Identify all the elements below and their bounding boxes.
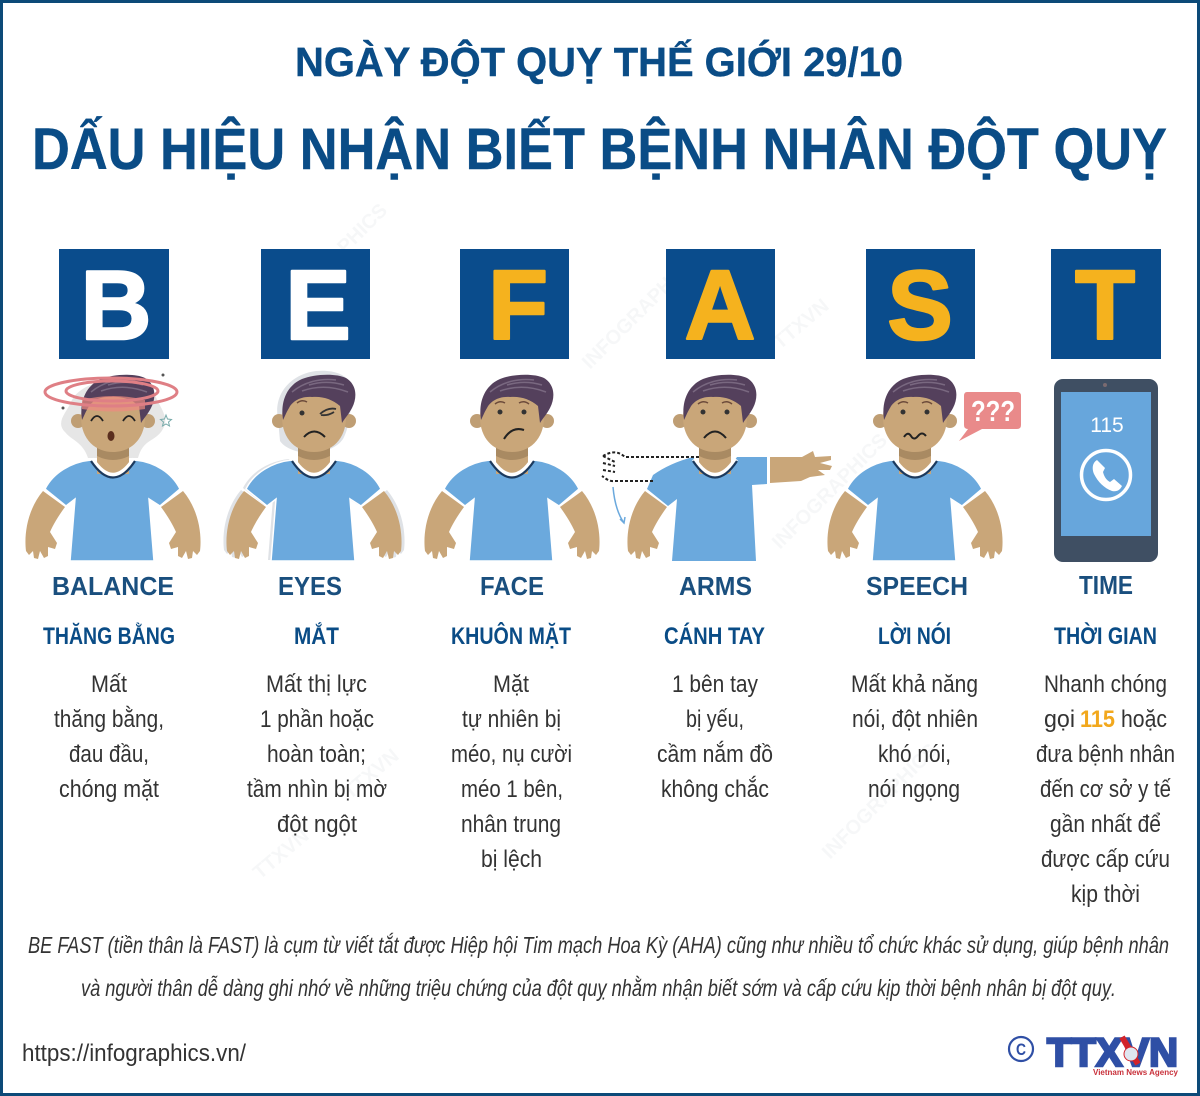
text block: time: được cấp cứu: [1041, 846, 1170, 873]
figure: eyes, vision loss person: [223, 371, 405, 561]
text block: face: bị lệch: [481, 846, 542, 873]
watermarks: INFOGRAPHICS: [818, 740, 942, 864]
text block: arms: [657, 671, 773, 803]
text block: face: [451, 671, 572, 873]
watermarks: TTXVN: [249, 825, 313, 884]
text block: time: kịp thời: [1071, 881, 1140, 908]
watermarks: TTXVN: [769, 295, 833, 354]
text block: eyes: 1 phần hoặc: [260, 706, 374, 733]
text block: balance: chóng mặt: [59, 776, 159, 803]
text block: face: méo, nụ cười: [451, 741, 572, 768]
figure: arms, one arm weak person: [602, 375, 832, 561]
English label row: BALANCE: [52, 571, 174, 601]
text block: time: [1036, 671, 1175, 908]
watermarks: INFOGRAPHICS: [268, 200, 392, 324]
text block: arms: bị yếu,: [686, 706, 744, 733]
Vietnamese heading row: KHUÔN MẶT: [451, 622, 571, 650]
text block: time: hoặc: [1121, 706, 1167, 733]
letter tile F: F: [488, 250, 548, 360]
Vietnamese heading row: THĂNG BẰNG: [43, 622, 175, 650]
Vietnamese heading row: MẮT: [294, 622, 339, 650]
letter tile S: [866, 249, 975, 360]
text block: eyes: tầm nhìn bị mờ: [247, 776, 387, 803]
figure: face, drooping mouth person: [424, 375, 600, 561]
figure: speech, slurred speech person: [827, 375, 1003, 561]
Vietnamese heading row: THỜI GIAN: [1054, 622, 1157, 650]
Vietnamese heading row: LỜI NÓI: [878, 622, 951, 650]
text block: time: đưa bệnh nhân: [1036, 741, 1175, 768]
text block: time: đến cơ sở y tế: [1040, 776, 1172, 803]
logo: TTXVN: C: [1016, 1040, 1026, 1059]
text block: speech: khó nói,: [878, 741, 951, 768]
text block: speech: Mất khả năng: [851, 671, 978, 698]
text block: speech: nói, đột nhiên: [852, 706, 978, 733]
title: event line: NGÀY ĐỘT QUỴ THẾ GIỚI 29/10: [295, 39, 903, 85]
text block: eyes: [247, 671, 387, 838]
speech bubble: [959, 392, 1021, 441]
text block: speech: [851, 671, 978, 803]
text block: balance: thăng bằng,: [54, 706, 164, 733]
text block: eyes: hoàn toàn;: [267, 741, 366, 768]
figure: balance, dizzy person: [25, 374, 201, 561]
English label row: EYES: [278, 571, 342, 601]
text block: balance: [54, 671, 164, 803]
watermarks: INFOGRAPHICS: [768, 430, 892, 554]
English label row: FACE: [480, 571, 544, 601]
text block: face: méo 1 bên,: [461, 776, 563, 803]
letter tile S: S: [887, 250, 953, 360]
text block: time: gần nhất để: [1050, 811, 1161, 838]
letter tile B: B: [81, 250, 151, 360]
watermarks: [249, 200, 942, 884]
English label row: ARMS: [679, 571, 752, 601]
footnote paragraph: [28, 932, 1169, 1001]
English label row: [52, 570, 1133, 601]
letter tile A: [666, 249, 775, 360]
text block: face: Mặt: [493, 671, 529, 698]
letter tile E: [261, 249, 370, 360]
text block: arms: 1 bên tay: [672, 671, 758, 698]
text block: eyes: Mất thị lực: [266, 671, 367, 698]
text block: time: Nhanh chóng: [1044, 671, 1167, 698]
text block: balance: đau đầu,: [69, 741, 149, 768]
icon: phone showing 115: 115: [1090, 414, 1124, 437]
text block: balance: Mất: [91, 671, 127, 698]
text block: arms: cầm nắm đồ: [657, 741, 773, 768]
icon: phone showing 115: [1054, 379, 1158, 562]
letter tile E: E: [285, 250, 351, 360]
source url: https://infographics.vn/: [22, 1040, 246, 1067]
letter tile F: [460, 249, 569, 360]
text block: speech: nói ngọng: [868, 776, 960, 803]
text block: eyes: đột ngột: [277, 811, 357, 838]
letter tile T: [1051, 249, 1161, 360]
speech bubble: ???: [971, 396, 1015, 428]
logo: TTXVN: TTXVN: [1047, 1031, 1178, 1075]
text block: time: 115: [1080, 706, 1115, 733]
text block: face: tự nhiên bị: [462, 706, 561, 733]
text block: arms: không chắc: [661, 776, 769, 803]
English label row: SPEECH: [866, 571, 968, 601]
English label row: TIME: [1079, 570, 1133, 600]
Vietnamese heading row: CÁNH TAY: [664, 622, 765, 650]
watermarks: INFOGRAPHICS: [578, 250, 702, 374]
text block: time: gọi: [1044, 706, 1075, 733]
watermarks: TTXVN: [339, 745, 403, 804]
letter tile B: [59, 249, 169, 360]
letter tile T: T: [1075, 250, 1135, 360]
logo: TTXVN: Vietnam News Agency: [1093, 1067, 1178, 1077]
text block: face: nhân trung: [461, 811, 561, 838]
letter tile A: A: [685, 250, 755, 360]
Vietnamese heading row: [43, 622, 1157, 650]
